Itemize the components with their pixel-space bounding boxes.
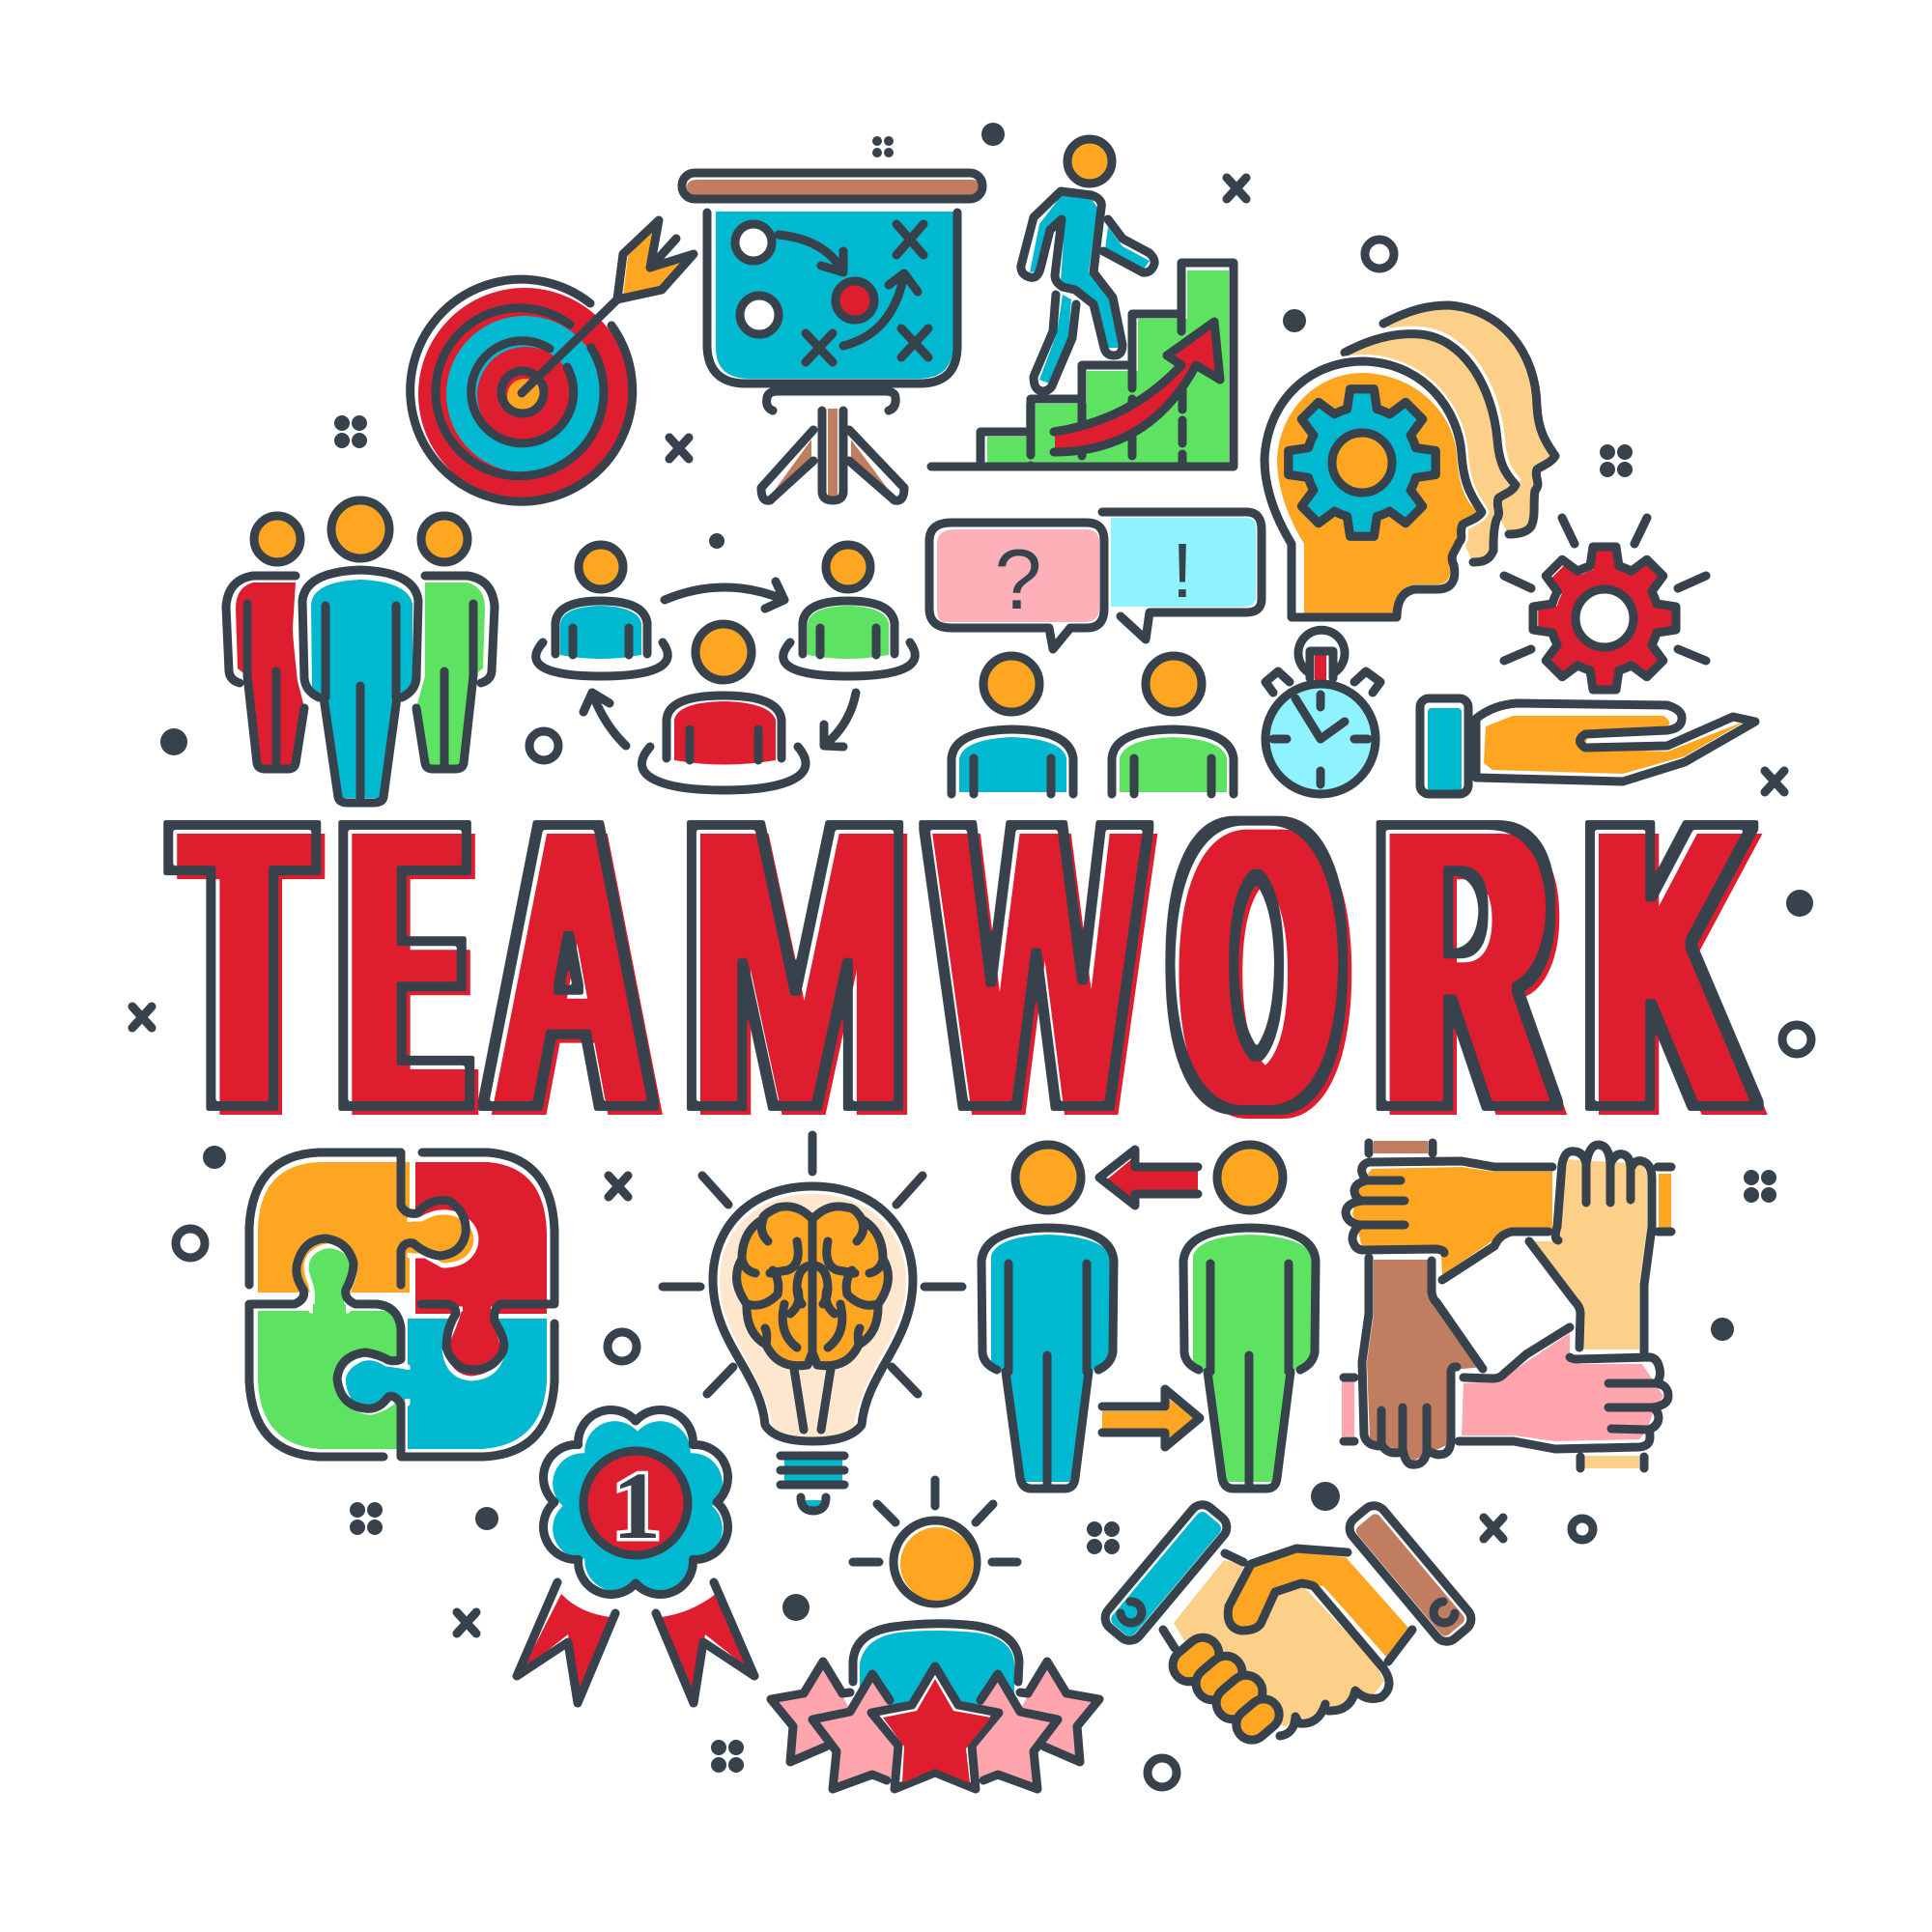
icon: light bulb with brain xyxy=(663,1135,962,1511)
exclamation mark: ! xyxy=(1172,527,1193,613)
icon: two people exchange xyxy=(981,1145,1316,1489)
title: TEAMWORK: M xyxy=(681,737,909,1193)
title: TEAMWORK: T xyxy=(184,738,300,1194)
decorative rings and crosses xyxy=(132,178,1811,1787)
icon: strategy board xyxy=(682,173,982,500)
title: TEAMWORK: W xyxy=(931,738,1144,1194)
icon: open hand with cuff xyxy=(1420,698,1755,794)
icon: target with arrow xyxy=(411,220,694,501)
decorative dots xyxy=(160,123,1813,1773)
icon: stopwatch xyxy=(1265,630,1380,794)
title: TEAMWORK: R xyxy=(1383,737,1546,1193)
icon: red gear with rays xyxy=(1504,518,1706,690)
title: TEAMWORK: A xyxy=(489,737,648,1194)
icon: four hands wrist grip xyxy=(1342,1141,1671,1468)
icon: two people with speech bubbles xyxy=(929,512,1262,794)
icon: person climbing stairs xyxy=(931,139,1234,467)
title: TEAMWORK: K xyxy=(1590,737,1747,1193)
icon: three people team xyxy=(226,500,495,803)
icon: handshake xyxy=(1100,1499,1476,1747)
icon: person with stars xyxy=(771,1480,1099,1789)
icon: three people rotation cycle xyxy=(536,545,915,790)
question mark: ? xyxy=(995,531,1041,627)
title: TEAMWORK: E xyxy=(350,737,459,1194)
title: TEAMWORK xyxy=(184,737,1747,1194)
arrow: outline left xyxy=(1099,1150,1198,1206)
arrow: red left xyxy=(1107,1156,1198,1203)
icon: thinking heads with gear xyxy=(1264,305,1555,617)
icon: award rosette with ribbons xyxy=(517,1410,754,1703)
title: TEAMWORK: O xyxy=(1179,737,1334,1193)
icon: jigsaw puzzle xyxy=(249,1152,554,1457)
arrow: orange right xyxy=(1102,1396,1194,1441)
icon: award rosette with ribbons: 1 xyxy=(612,1452,661,1559)
arrow: outline right xyxy=(1102,1389,1200,1447)
